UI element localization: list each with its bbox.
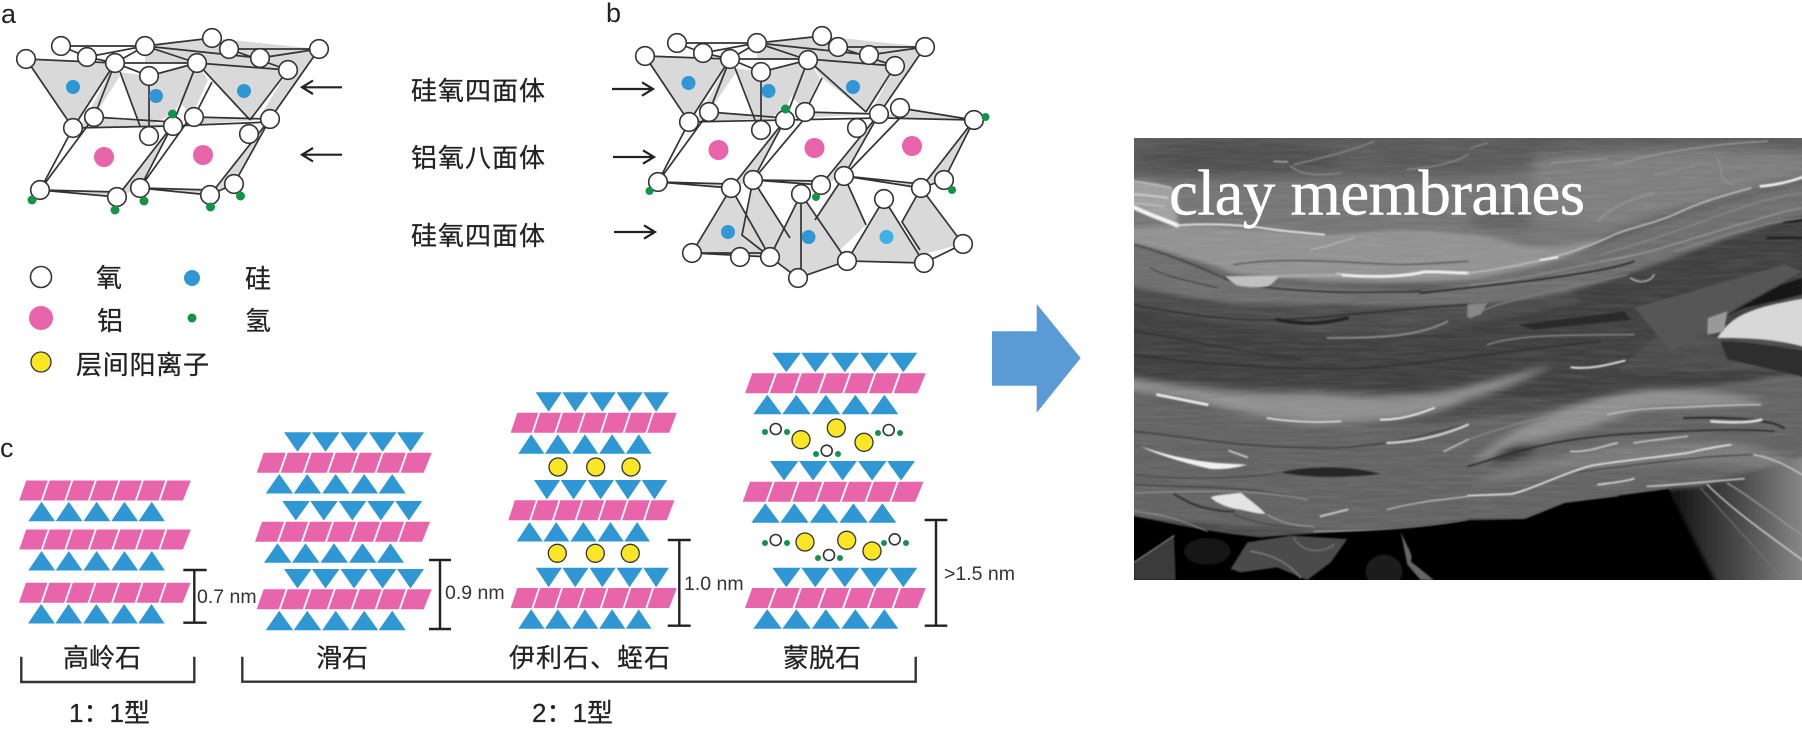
photo title: clay membranes (1169, 158, 1585, 230)
grey lines lower (1134, 491, 1307, 500)
bright streaks (1134, 181, 1171, 188)
mineral names (63, 643, 861, 673)
debris under the film (1134, 536, 1176, 580)
spacing bar 1.5 nm (925, 520, 1015, 626)
silicon, aluminium and hydrogen atoms (28, 80, 251, 214)
bonds (645, 36, 974, 278)
panel a: kaolinite crystal structure (1, 0, 342, 214)
layer labels: 硅氧四面体 (411, 221, 545, 251)
spacing bar 1.5 nm: >1.5 nm (944, 563, 1015, 585)
spacing bar 0.9 nm: 0.9 nm (445, 582, 505, 604)
gray tetrahedra (645, 36, 974, 278)
bracket 2:1 type (242, 657, 916, 728)
bracket 1:1 type: 1：1型 (69, 698, 150, 728)
panel: SEM photo of clay membranes (1121, 125, 1802, 588)
wedge and white flake (1635, 265, 1802, 351)
fibrous rays (1668, 455, 1802, 585)
legend: 层间阳离子 (76, 350, 209, 380)
oxygen atoms (636, 27, 983, 287)
stack: kaolinite (19, 480, 191, 624)
stack: talc (255, 432, 432, 630)
spacing bar 0.9 nm (429, 560, 505, 629)
bonds (26, 38, 319, 197)
bracket 1:1 type (21, 657, 194, 728)
mineral names: 滑石 (316, 643, 368, 673)
layer labels: 硅氧四面体 (411, 76, 545, 106)
legend: 硅 (245, 264, 271, 294)
layer labels: 铝氧八面体 (411, 143, 545, 173)
mineral names: 高岭石 (63, 643, 141, 673)
silicon, aluminium and hydrogen atoms (646, 76, 990, 244)
bracket 2:1 type: 2：1型 (532, 698, 613, 728)
arrows a (302, 80, 342, 162)
layer labels (411, 76, 545, 251)
panel c: stacking diagrams (0, 353, 1015, 728)
upper layered bright lines (1327, 321, 1447, 338)
arrows b (612, 82, 655, 239)
mineral names: 蒙脱石 (783, 643, 861, 673)
spacing bar 0.7 nm (183, 570, 257, 623)
gray tetrahedra (26, 38, 319, 197)
stack: illite and vermiculite (508, 392, 677, 629)
spacing bar 1.0 nm (668, 540, 744, 626)
spacing bar 1.0 nm: 1.0 nm (684, 573, 744, 595)
legend (29, 263, 271, 380)
black void (1134, 488, 1718, 580)
faint upper ripples (1294, 141, 1374, 165)
legend: 氧 (96, 263, 122, 293)
spacing bar 0.7 nm: 0.7 nm (197, 586, 257, 608)
lower white spots (1141, 446, 1247, 469)
legend: 氢 (245, 306, 271, 336)
arrow: blue block arrow (992, 304, 1081, 413)
panel b: talc-type crystal structure (606, 0, 990, 287)
oxygen atoms (17, 29, 328, 206)
dark layer gaps (1134, 245, 1224, 278)
legend: 铝 (97, 306, 123, 336)
dark layer gaps lower (1134, 425, 1468, 448)
label c: c (0, 433, 14, 463)
mineral names: 伊利石、蛭石 (509, 643, 670, 673)
stack: montmorillonite (743, 353, 926, 629)
